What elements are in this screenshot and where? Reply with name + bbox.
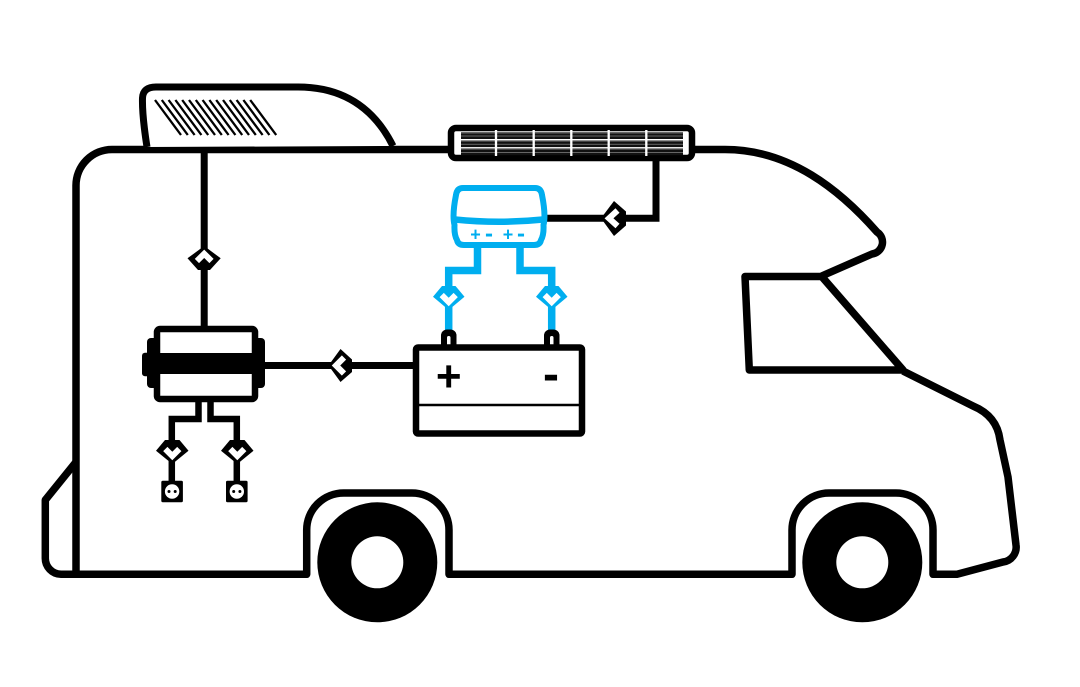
- battery plus sign: +: [436, 352, 462, 401]
- solar cells: [461, 132, 683, 155]
- connector: right socket: [221, 440, 254, 464]
- battery: [416, 330, 582, 434]
- socket: right: [226, 481, 248, 502]
- solar cell highlights: [461, 132, 683, 153]
- battery negative terminal: [544, 330, 560, 352]
- connector: battery positive: [433, 286, 464, 310]
- wires: inverter to sockets: [172, 400, 237, 482]
- wire: solar panel to charge controller: [546, 158, 656, 218]
- controller terminal labels: -: [517, 220, 525, 248]
- front wheel: [802, 502, 922, 622]
- connector: battery negative: [536, 286, 568, 310]
- charge controller: [454, 188, 544, 248]
- controller terminal labels: +: [503, 224, 513, 244]
- blue wires: controller to battery: [449, 245, 552, 332]
- roof air conditioner: [142, 87, 393, 147]
- controller terminal labels: -: [485, 220, 493, 248]
- controller terminal labels: [470, 220, 525, 248]
- vehicle body outline: [45, 150, 1016, 574]
- wire: air conditioner to inverter: [201, 150, 208, 328]
- connector: air conditioner line: [188, 246, 221, 270]
- battery minus sign: -: [543, 348, 559, 401]
- wire: inverter to battery: [262, 362, 416, 369]
- inverter: [142, 329, 265, 399]
- battery positive terminal: [441, 330, 456, 352]
- connector: solar line: [601, 201, 626, 236]
- rear wheel: [317, 502, 437, 622]
- controller terminal labels: +: [470, 224, 481, 244]
- socket: left: [161, 481, 183, 502]
- air conditioner vent hatching: [155, 100, 276, 135]
- connector: inverter line: [328, 349, 352, 382]
- connector: left socket: [156, 440, 188, 464]
- solar panel: [451, 128, 692, 158]
